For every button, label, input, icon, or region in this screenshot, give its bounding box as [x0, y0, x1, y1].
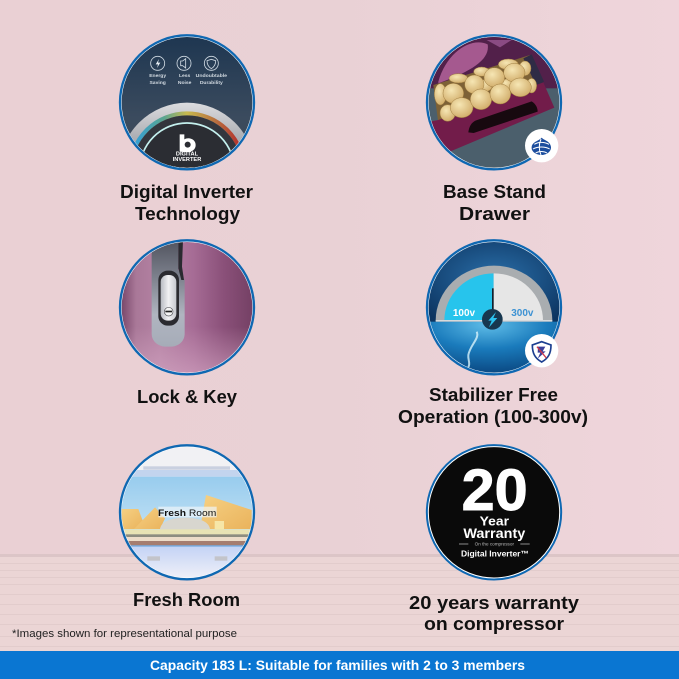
- warranty text: Year: [480, 513, 509, 528]
- heading: 20 years warranty: [409, 593, 579, 634]
- heading: digital inverter technology: Technology: [135, 204, 240, 224]
- warranty text: Digital Inverter™: [461, 549, 529, 559]
- digital inverter logo: [173, 134, 201, 163]
- gauge labels: 300v: [511, 308, 534, 319]
- feature icon labels: Durability: [200, 80, 223, 86]
- icon: fresh room circle: [120, 445, 254, 580]
- gauge base: [436, 320, 552, 322]
- gauge labels: 100v: [453, 308, 476, 319]
- heading: base stand drawer: Base Stand: [443, 182, 546, 202]
- digital inverter logo: DIGITAL: [176, 152, 199, 158]
- capacity banner: [0, 651, 679, 679]
- warranty text: Warranty: [463, 525, 526, 541]
- icon: stabilizer free gauge circle: [425, 240, 565, 378]
- icon: 20 year warranty badge: [427, 445, 561, 579]
- icon: base stand drawer circle: [425, 35, 565, 175]
- heading: stabilizer free operation: Operation (100-300v): [398, 407, 588, 427]
- stabilizer badge: [525, 334, 558, 367]
- icon: digital inverter circle: [118, 34, 256, 170]
- feature icon labels: Noise: [178, 80, 192, 86]
- heading: base stand drawer: Drawer: [459, 204, 530, 224]
- icon: lock and key circle: [120, 240, 254, 374]
- heading: digital inverter technology: [120, 182, 253, 224]
- warranty text: On the compressor: [475, 541, 515, 546]
- warranty text: [461, 513, 529, 559]
- heading: 20 years warranty: 20 years warranty: [409, 593, 579, 613]
- floor planks: [0, 554, 679, 651]
- feature icon labels: Energy: [149, 73, 166, 79]
- heading: lock and key: Lock & Key: [137, 387, 237, 407]
- feature icon labels: [149, 73, 227, 86]
- feature icon labels: Saving: [149, 80, 166, 86]
- digital inverter logo: INVERTER: [173, 157, 201, 163]
- potatoes: [434, 59, 537, 121]
- heading: fresh room: Fresh Room: [133, 590, 240, 610]
- feature icon labels: Less: [179, 73, 191, 79]
- gauge labels: [453, 308, 534, 319]
- heading: stabilizer free operation: [398, 385, 588, 427]
- lock button: [158, 271, 179, 326]
- warranty number: 20: [462, 458, 528, 523]
- feature icon labels: Undoubtable: [196, 73, 227, 79]
- footnote: *Images shown for representational purpose: [12, 628, 237, 640]
- heading: stabilizer free operation: Stabilizer Free: [429, 385, 558, 405]
- drawer badge: [525, 129, 558, 162]
- gauge needle: [482, 288, 503, 330]
- heading: 20 years warranty: on compressor: [424, 614, 564, 634]
- capacity banner: Capacity 183 L: Suitable for families with 2 to 3 members: [150, 657, 525, 673]
- heading: base stand drawer: [443, 182, 546, 224]
- feature icons row: [151, 56, 218, 70]
- heading: digital inverter technology: Digital Inverter: [120, 182, 253, 202]
- fresh room label: Fresh Room: [158, 508, 216, 518]
